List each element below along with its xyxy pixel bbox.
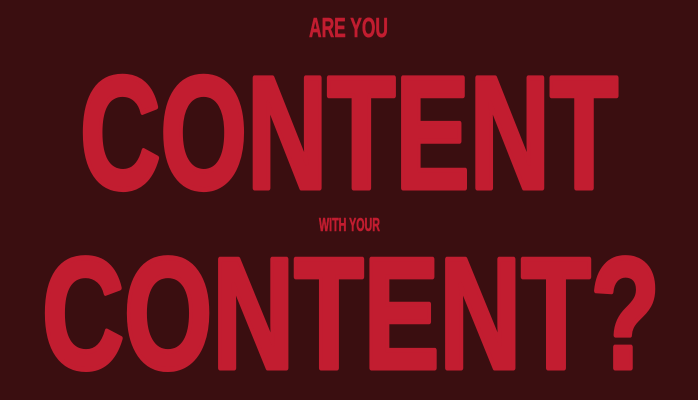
heading: are you: ARE YOU (309, 12, 388, 43)
heading: with your: WITH YOUR (319, 215, 380, 235)
